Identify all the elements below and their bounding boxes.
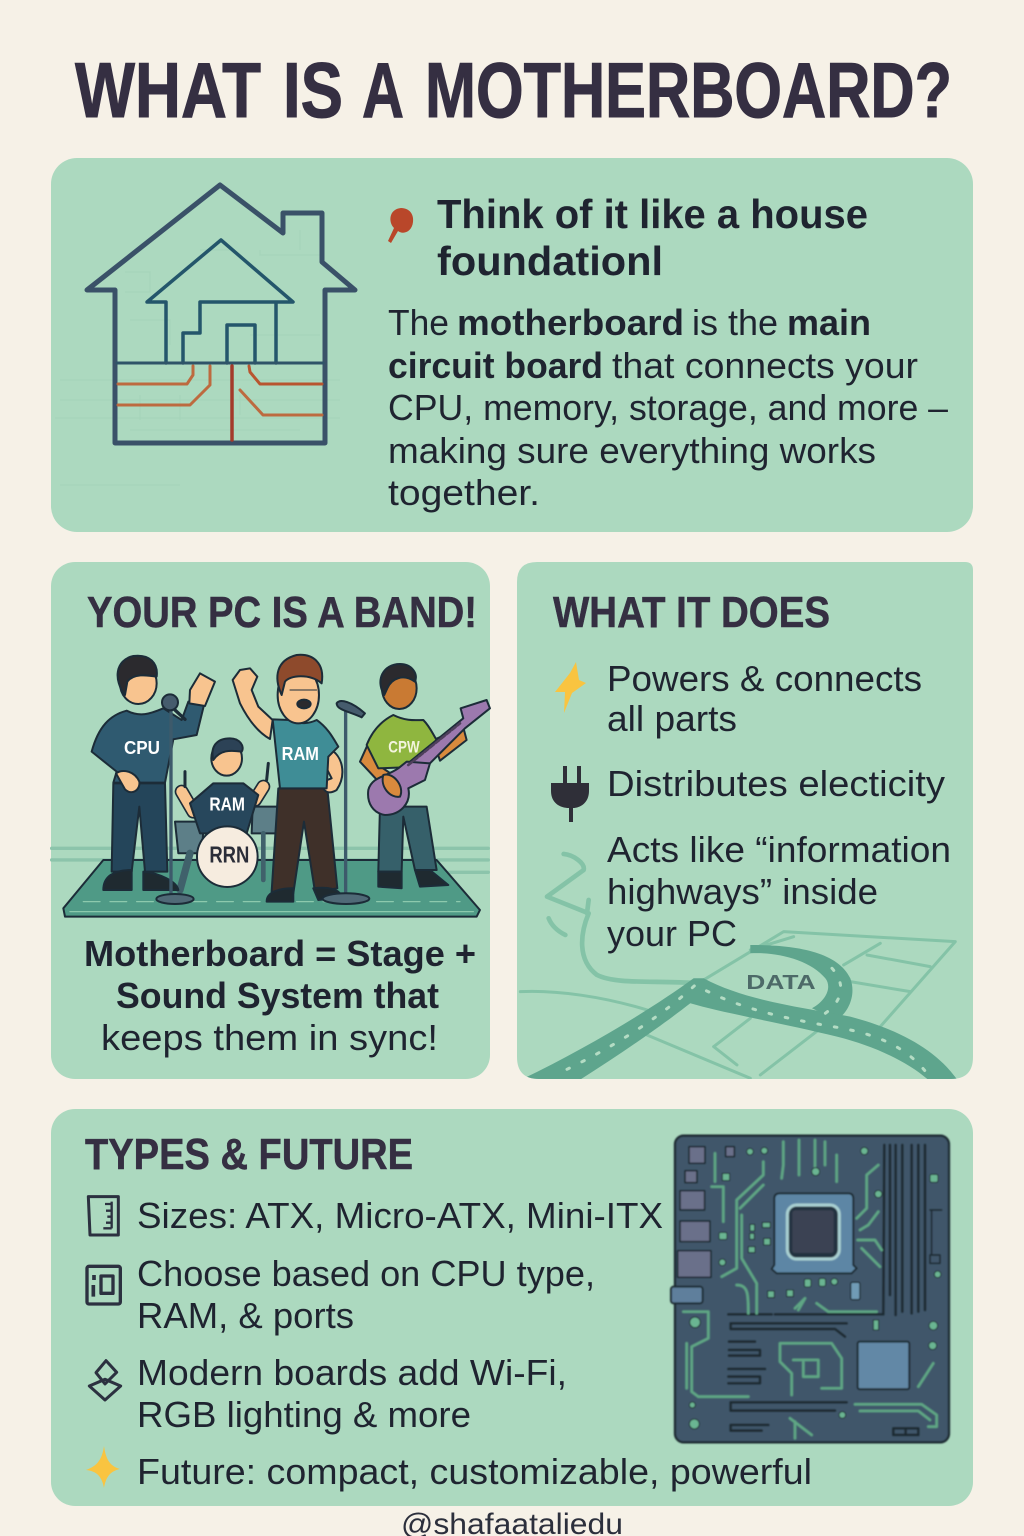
illustration: motherboard: [671, 1136, 949, 1442]
drummer: [175, 822, 204, 853]
illustration: band on stage: CPW: [388, 737, 420, 756]
heading: house foundation: [437, 191, 868, 284]
title: A: [362, 46, 404, 134]
text: powers and connects: Powers & connects: [607, 658, 922, 699]
text: powers and connects: all parts: [607, 698, 737, 739]
illustration: band on stage: [52, 655, 490, 917]
person guitarist: [378, 807, 437, 872]
heading: what it does: WHAT IT DOES: [553, 588, 830, 637]
text block: motherboard definition: motherboard: [457, 302, 684, 343]
panel: types and future: [51, 1109, 973, 1506]
heading: house foundation: foundationl: [437, 238, 663, 284]
text block: motherboard definition: CPU, memory, storage, and more –: [388, 387, 948, 428]
illustration: band on stage: RAM: [282, 743, 319, 764]
text: information highways: [607, 829, 951, 954]
text: modern boards: RGB lighting & more: [137, 1394, 471, 1435]
text: modern boards: Modern boards add Wi-Fi,: [137, 1352, 567, 1393]
heading: types and future: TYPES & FUTURE: [85, 1130, 413, 1179]
text block: motherboard definition: making sure everything works: [388, 430, 876, 471]
text: choose based on: RAM, & ports: [137, 1295, 354, 1336]
text block: motherboard equals stage: keeps them in sync!: [101, 1017, 438, 1058]
illustration: data highways map: [517, 854, 959, 1082]
icon: overlapping diamonds: [89, 1361, 121, 1400]
text: choose based on: [137, 1253, 595, 1336]
text block: motherboard definition: that connects your: [612, 345, 918, 386]
text block: motherboard equals stage: Motherboard = Stage +: [84, 933, 476, 974]
text: information highways: highways” inside: [607, 871, 878, 912]
illustration: band on stage: RRN: [209, 842, 249, 868]
heading: house foundation: Think of it like a house: [437, 191, 868, 237]
title: WHAT: [75, 46, 261, 134]
text block: motherboard definition: is the: [692, 302, 778, 343]
text: sizes: Sizes: ATX, Micro-ATX, Mini-ITX: [137, 1195, 663, 1236]
text block: motherboard definition: together.: [388, 472, 540, 513]
icon: CPU socket: [87, 1266, 120, 1304]
icon: gold sparkle: [86, 1446, 120, 1488]
text: information highways: Acts like “information: [607, 829, 951, 870]
illustration: data highways map: DATA: [746, 972, 816, 994]
panel: your PC is a band: [51, 562, 490, 1079]
person CPU: [112, 783, 167, 872]
panel: house foundation: [51, 158, 973, 532]
icon: power plug: [551, 766, 589, 822]
text: future: Future: compact, customizable, powerful: [137, 1451, 812, 1492]
illustration: band on stage: RAM: [209, 793, 245, 814]
text: powers and connects: [607, 658, 922, 739]
text block: motherboard equals stage: [84, 933, 476, 1058]
text: modern boards: [137, 1352, 567, 1435]
title: [75, 46, 952, 134]
text block: motherboard definition: main: [787, 302, 871, 343]
text block: motherboard definition: [388, 302, 948, 513]
heading: band: YOUR PC IS A BAND!: [87, 588, 477, 637]
icon: house with foundation wiring: [87, 185, 355, 443]
icon: red pin: [388, 208, 413, 243]
text block: motherboard definition: circuit board: [388, 345, 603, 386]
text: choose based on: Choose based on CPU type,: [137, 1253, 595, 1294]
text block: motherboard equals stage: Sound System that: [116, 975, 439, 1016]
text: information highways: your PC: [607, 913, 737, 954]
title: IS: [283, 46, 343, 134]
illustration: band on stage: CPU: [124, 737, 160, 758]
person RAM: [272, 788, 337, 893]
text: distributes electricity: Distributes electicity: [607, 763, 945, 804]
text block: motherboard definition: The: [388, 302, 449, 343]
icon: size ruler: [88, 1197, 118, 1235]
panel: what it does: [517, 562, 973, 1082]
icon: lightning bolt: [555, 662, 586, 713]
